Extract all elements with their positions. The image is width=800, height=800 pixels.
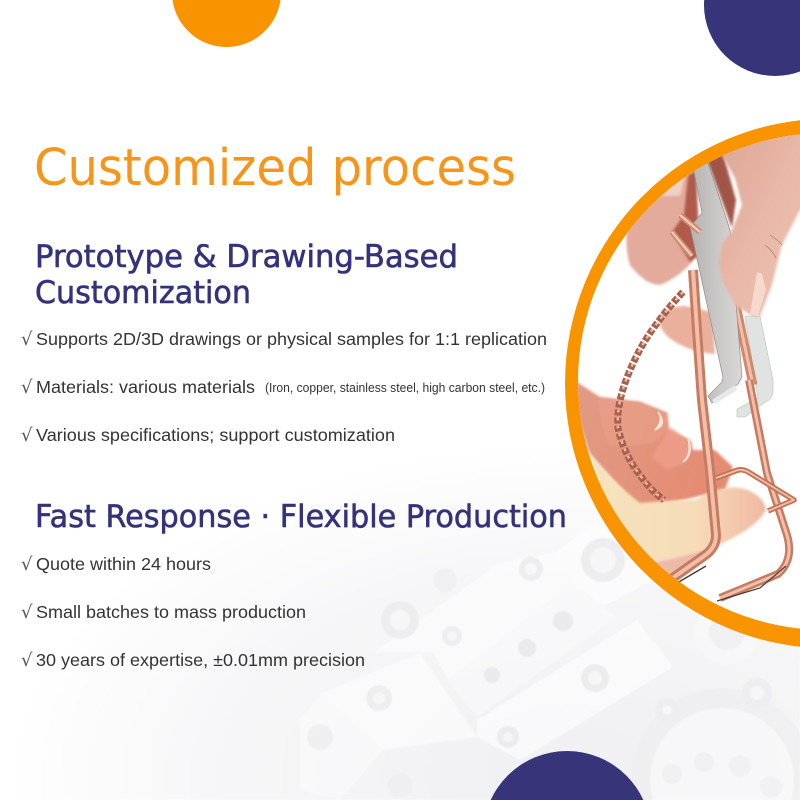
checklist: production features: 30 years of expertise, ±0.01mm precision bbox=[36, 650, 365, 670]
checklist: customization features: Materials: various materials bbox=[36, 377, 255, 397]
checklist: customization features: (Iron, copper, stainless steel, high carbon steel, etc.) bbox=[265, 381, 545, 395]
copper wire left bbox=[670, 270, 716, 580]
decorative circle: bottom navy bbox=[483, 751, 651, 800]
checklist: customization features: √ bbox=[21, 425, 33, 446]
checklist: production features: √ bbox=[21, 554, 33, 575]
copper triangle loop bbox=[716, 470, 794, 511]
checklist: production features bbox=[21, 554, 365, 671]
product photo: hands holding copper and steel clip bbox=[572, 125, 800, 630]
checklist: customization features: Supports 2D/3D drawings or physical samples for 1:1 replication bbox=[36, 329, 547, 349]
copper wire right bbox=[720, 380, 789, 598]
decorative circle: top right navy bbox=[704, 0, 800, 76]
heading: fast response: Fast Response · Flexible Production bbox=[35, 499, 567, 535]
orange ring frame bbox=[565, 118, 800, 648]
copper wire upper bends bbox=[672, 215, 700, 256]
upper left finger bbox=[626, 172, 692, 285]
heading: prototype customization bbox=[35, 239, 458, 311]
checklist: production features: √ bbox=[21, 650, 33, 671]
title: Customized process bbox=[34, 139, 516, 198]
steel tool front bbox=[690, 160, 742, 403]
chain bbox=[618, 292, 683, 500]
lower hand fingers bbox=[572, 380, 733, 510]
checklist: customization features: √ bbox=[21, 329, 33, 350]
checklist: production features: Small batches to mass production bbox=[36, 602, 306, 622]
steel tool back bbox=[737, 316, 773, 417]
checklist: customization features: Various specifications; support customization bbox=[36, 425, 395, 445]
checklist: customization features bbox=[21, 329, 547, 446]
checklist: customization features: √ bbox=[21, 377, 33, 398]
copper strip between steels bbox=[735, 300, 753, 385]
decorative circle: top orange bbox=[172, 0, 281, 47]
upper right hand and thumb bbox=[719, 125, 800, 316]
lower hand thumb bbox=[588, 450, 766, 562]
small middle finger bbox=[658, 306, 715, 354]
checklist: production features: Quote within 24 hours bbox=[36, 554, 211, 574]
checklist: production features: √ bbox=[21, 602, 33, 623]
heading: prototype customization: Prototype & Drawing-Based bbox=[35, 239, 458, 275]
background: faded machine photo bbox=[0, 330, 800, 800]
heading: prototype customization: Customization bbox=[35, 275, 251, 311]
